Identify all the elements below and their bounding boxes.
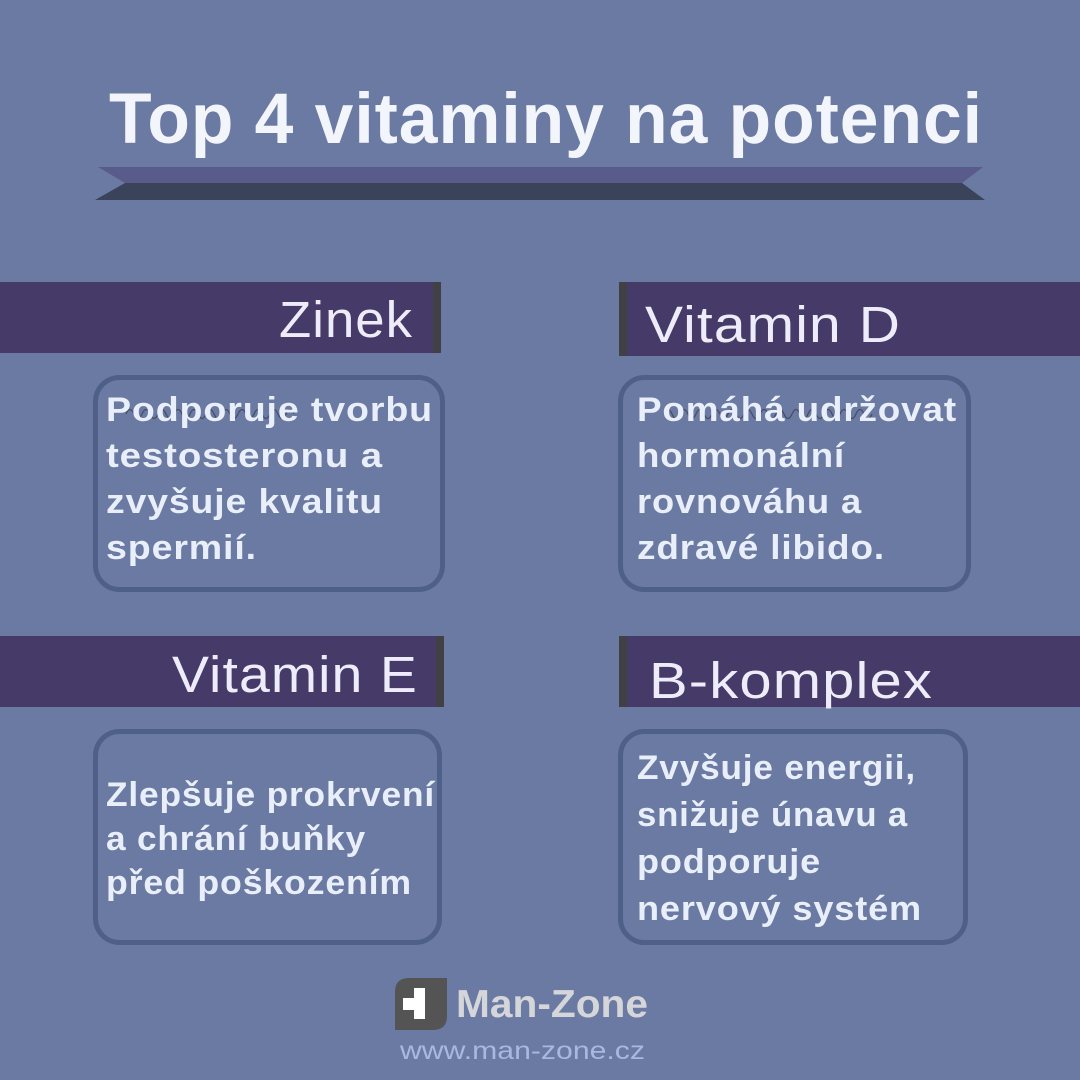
card: B-komplex description: Zvyšuje energii, [637, 749, 916, 787]
card: Vitamin D description: rovnováhu a [637, 483, 862, 521]
card: Vitamin D description [620, 378, 968, 590]
logo: Man-Zone: Man-Zone [456, 983, 648, 1026]
card: B-komplex description: nervový systém [637, 890, 922, 928]
panel: B-komplex [619, 636, 1080, 942]
card: Zinek description: zvyšuje kvalitu [106, 483, 383, 521]
panel: Vitamin D [619, 282, 1080, 590]
card: Vitamin D description: Pomáhá udržovat [637, 391, 957, 429]
heading bar: Vitamin E: Vitamin E [172, 646, 418, 703]
panel: Zinek [0, 282, 442, 590]
card: Vitamin E description: Zlepšuje prokrvení [106, 776, 436, 814]
heading bar: Vitamin D [619, 282, 1080, 356]
title ribbon [95, 167, 985, 200]
heading bar: Zinek: Zinek [279, 291, 413, 348]
card: B-komplex description: podporuje [637, 843, 821, 881]
heading bar: B-komplex: B-komplex [649, 652, 933, 709]
card: Zinek description: spermií. [106, 529, 257, 567]
card: Vitamin E description: a chrání buňky [106, 820, 366, 858]
logo: Man-Zone [395, 978, 648, 1030]
heading bar: Vitamin D: Vitamin D [645, 296, 901, 353]
panel: Vitamin E [0, 636, 444, 942]
card: Zinek description: Podporuje tvorbu [106, 391, 433, 429]
card: B-komplex description [620, 732, 966, 942]
heading bar: B-komplex [619, 636, 1080, 709]
card: Vitamin E description: před poškozením [106, 864, 412, 902]
card: B-komplex description: snižuje únavu a [637, 796, 908, 834]
card: Vitamin D description: hormonální [637, 437, 846, 475]
card: Zinek description: testosteronu a [106, 437, 383, 475]
heading bar: Vitamin E [0, 636, 444, 707]
icon: logo mark [395, 978, 447, 1030]
card: Vitamin D description: zdravé libido. [637, 529, 885, 567]
title: Top 4 vitaminy na potenci [109, 80, 983, 159]
card: Zinek description [96, 378, 442, 590]
website url: www.man-zone.cz [399, 1037, 645, 1065]
card: Vitamin E description [96, 732, 440, 942]
heading bar: Zinek [0, 282, 441, 353]
